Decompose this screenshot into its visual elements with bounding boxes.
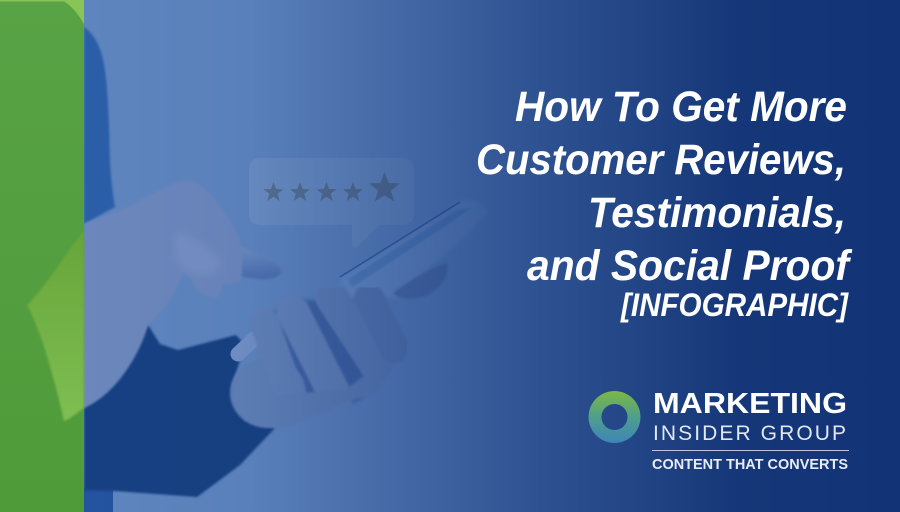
logo: Marketing Insider Group: CONTENT THAT CONVERTS <box>652 456 848 473</box>
photo: shirt sleeve <box>84 325 275 497</box>
title: How To Get More <box>515 83 847 131</box>
icon: rating stars <box>264 172 400 202</box>
photo: smartphone <box>340 200 487 300</box>
title <box>476 83 852 323</box>
logo: Marketing Insider Group: MARKETING <box>653 388 847 420</box>
title: [INFOGRAPHIC] <box>620 287 849 323</box>
photo: holding hand <box>230 298 402 428</box>
logo: Marketing Insider Group <box>589 388 849 473</box>
finger behind phone <box>393 263 448 299</box>
green side panel <box>0 0 84 512</box>
logo: Marketing Insider Group: INSIDER GROUP <box>653 422 846 445</box>
icon: logo ring <box>589 391 641 443</box>
lime sleeve highlight <box>27 231 84 421</box>
title: and Social Proof <box>527 242 852 290</box>
photo: pointing hand <box>84 181 282 408</box>
title: Testimonials, <box>588 189 846 237</box>
title: Customer Reviews, <box>476 136 846 184</box>
photo: rating speech bubble <box>249 158 414 247</box>
